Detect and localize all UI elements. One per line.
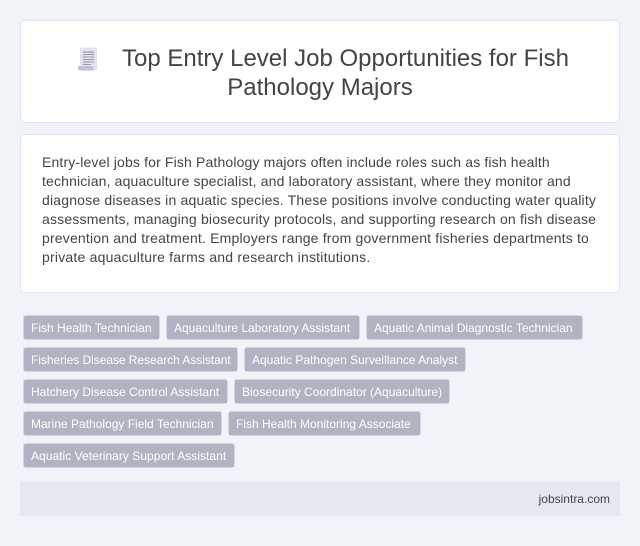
text block: description <box>42 154 596 265</box>
text block: description: prevention and treatment. Employers range from government fisheries departments to <box>42 230 589 246</box>
icon: document <box>78 47 97 70</box>
text block: description: diagnose diseases in aquatic species. These positions involve conducting water quality <box>42 192 596 208</box>
tag: Aquatic Pathogen Surveillance Analyst <box>252 353 457 367</box>
title <box>122 45 569 101</box>
tag: Aquatic Animal Diagnostic Technician <box>374 321 573 335</box>
footer text: jobsintra.com <box>539 492 610 506</box>
tag <box>23 347 238 372</box>
title: Top Entry Level Job Opportunities for Fish <box>122 45 569 72</box>
tag: Hatchery Disease Control Assistant <box>31 385 219 399</box>
tag: Fish Health Monitoring Associate <box>236 417 411 431</box>
tag <box>166 315 360 340</box>
panel: header <box>20 20 620 123</box>
tag <box>244 347 466 372</box>
tag: Aquaculture Laboratory Assistant <box>174 321 350 335</box>
text block: description: assessments, managing biosecurity protocols, and supporting research on fish disease <box>42 211 596 227</box>
text block: description: technician, aquaculture specialist, and laboratory assistant, where they monitor and <box>42 173 571 189</box>
tag <box>23 315 160 340</box>
text block: description: Entry-level jobs for Fish Pathology majors often include roles such as fish health <box>42 154 550 170</box>
panel: description <box>20 134 620 293</box>
footer <box>20 482 620 516</box>
job tags <box>23 315 583 468</box>
text block: description: private aquaculture farms and research institutions. <box>42 249 370 265</box>
tag: Marine Pathology Field Technician <box>31 417 214 431</box>
tag: Aquatic Veterinary Support Assistant <box>31 449 226 463</box>
tag: Fish Health Technician <box>31 321 152 335</box>
tag <box>23 379 228 404</box>
tag: Fisheries Disease Research Assistant <box>31 353 231 367</box>
tag <box>228 411 421 436</box>
title: Pathology Majors <box>227 74 413 101</box>
tag <box>234 379 450 404</box>
tag <box>23 443 235 468</box>
tag <box>23 411 222 436</box>
tag <box>366 315 583 340</box>
tag: Biosecurity Coordinator (Aquaculture) <box>242 385 442 399</box>
